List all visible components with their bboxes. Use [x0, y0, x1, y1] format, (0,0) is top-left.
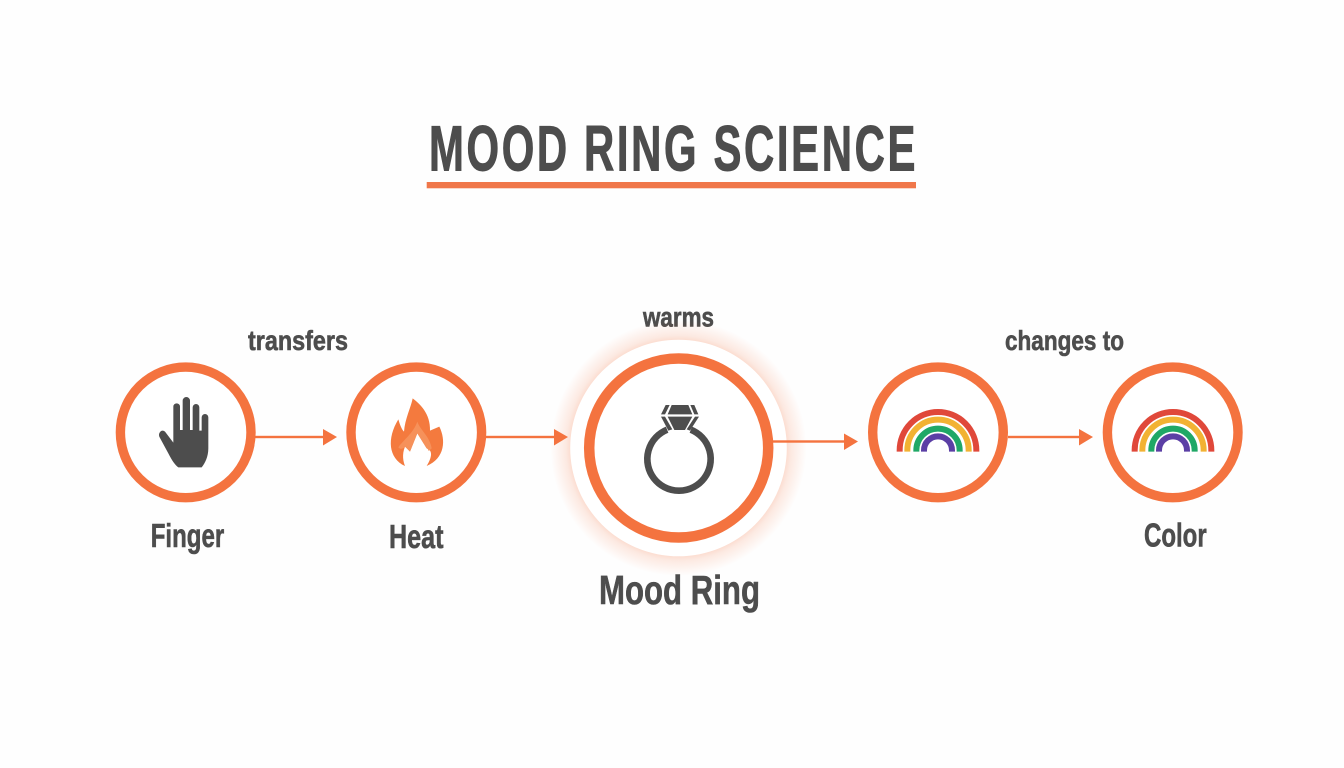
node label: Finger: Finger	[151, 517, 224, 554]
arrow: rainbow to color	[1008, 429, 1093, 446]
node: finger	[120, 367, 251, 498]
icon: flame	[391, 398, 443, 466]
icon: hand	[159, 397, 208, 467]
node: heat	[351, 367, 482, 498]
node: color	[1107, 367, 1238, 498]
arrow: finger to heat	[255, 429, 337, 446]
color circle	[1107, 367, 1238, 498]
arrow: heat to mood ring	[486, 429, 568, 446]
icon: rainbow	[1135, 412, 1211, 452]
node: mood ring	[550, 320, 858, 576]
connector label: changes to: changes to	[1005, 325, 1124, 356]
arrow: mood ring to rainbow	[773, 434, 858, 450]
node: rainbow	[873, 367, 1003, 498]
title: MOOD RING SCIENCE	[429, 113, 918, 185]
connector label: transfers: transfers	[248, 325, 348, 356]
connector label: warms: warms	[642, 302, 714, 333]
white halo	[570, 340, 787, 556]
node label: Color: Color	[1144, 517, 1207, 554]
title	[427, 113, 918, 188]
finger circle	[120, 367, 251, 498]
heat circle	[351, 367, 482, 498]
ring glow	[550, 320, 806, 576]
node label: Heat: Heat	[389, 518, 444, 555]
node label: Mood Ring: Mood Ring	[599, 567, 760, 613]
icon: rainbow	[900, 412, 976, 452]
rainbow circle	[873, 367, 1003, 498]
icon: ring	[647, 405, 711, 491]
mood ring circle	[589, 358, 768, 538]
